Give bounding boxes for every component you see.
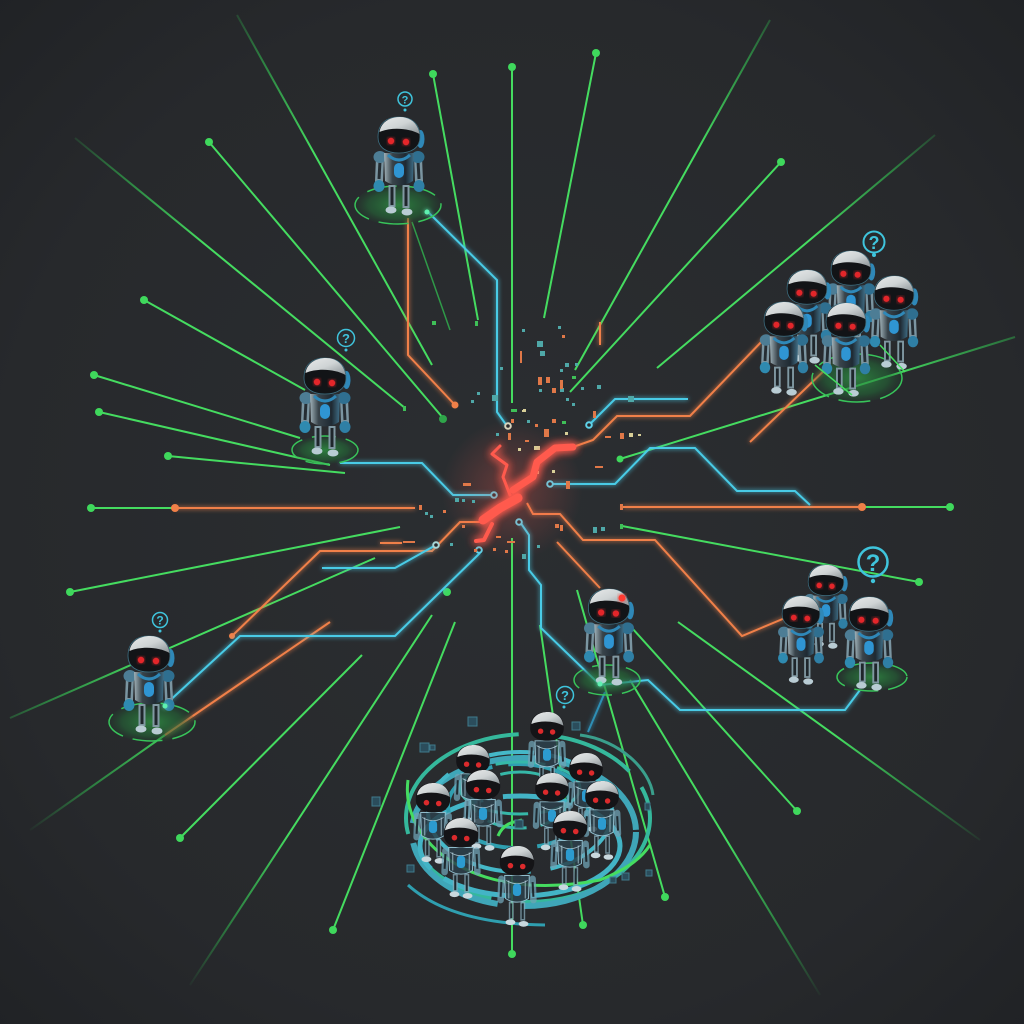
green endpoint dots [66,49,954,958]
platform: right group [837,663,907,691]
question mark: top robot: ? [402,94,409,106]
robot: left [300,358,350,456]
question mark: lower-left robot [152,612,168,632]
platform: left robot [292,436,358,464]
solid green rays ending in dots [70,53,950,954]
cyan signal lines [165,212,860,732]
swirling rings under the robot cluster [406,734,653,925]
question mark: lower-left robot: ? [156,614,164,628]
question mark: cluster [556,686,574,708]
platform: top robot [355,185,441,225]
robot: top [374,117,424,216]
platform: upper-right group [812,354,902,402]
orange signal lines [165,218,862,735]
question mark: upper-right group [864,232,884,257]
question mark: right group: ? [866,550,880,577]
question mark: top robot [398,92,412,112]
fractured red core [476,446,573,541]
question mark: left robot: ? [342,331,350,346]
robot cluster on the swirl [416,712,619,927]
robot: lower left [124,636,174,734]
floating cubes around the cluster [372,717,652,883]
orange endpoint dots [171,402,866,639]
green glints across the upper-right platform [815,345,905,395]
right robot group [778,565,893,691]
platform: centre-right robot [574,665,640,695]
data fragments around the core [403,321,641,559]
question mark: upper-right group: ? [868,233,880,253]
question mark: left robot [338,330,354,352]
question mark: cluster: ? [561,688,569,703]
question mark: right group [858,548,888,583]
robot: centre right with orange glow [584,589,634,686]
core glow [442,420,582,560]
upper-right robot group [760,251,918,397]
glowing link ends on robot platforms [162,210,602,708]
cyan ring terminals [433,422,592,553]
platform: lower-left robot [109,702,195,742]
